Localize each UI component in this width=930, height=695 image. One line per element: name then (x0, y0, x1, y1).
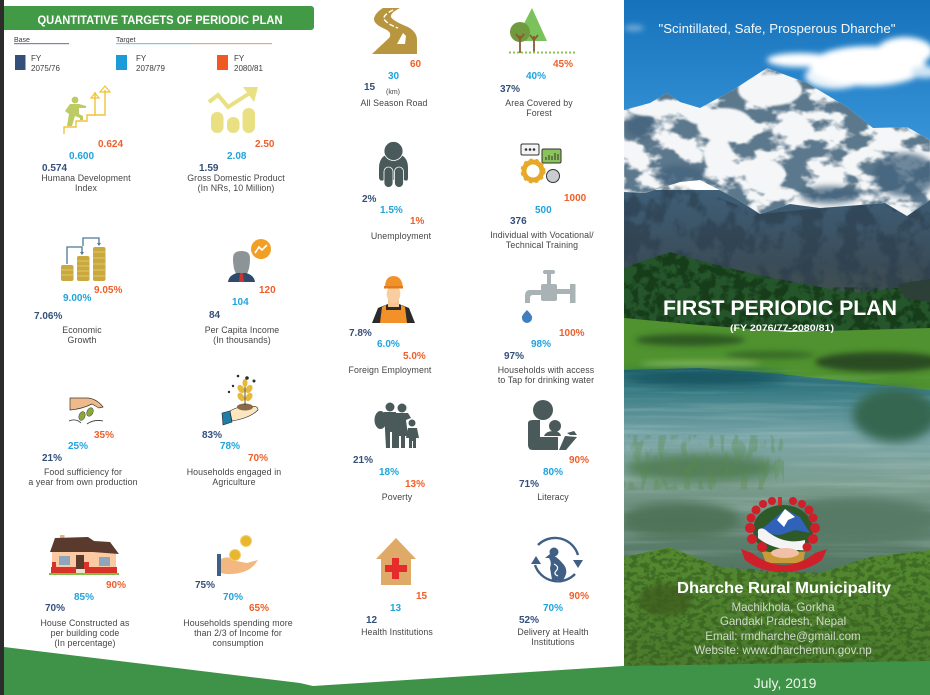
values: 6.0% (377, 339, 400, 350)
icon: hand dropping seeds (69, 398, 103, 424)
panel: House Constructed (40, 535, 130, 648)
label: Households with access (498, 365, 595, 375)
values: 5.0% (403, 351, 426, 362)
values: 2.50 (255, 139, 275, 150)
values: 7.06% (34, 311, 62, 322)
legend (14, 37, 272, 73)
values: 30 (388, 71, 400, 82)
label: Agriculture (212, 477, 256, 487)
legend: FY (136, 54, 147, 63)
values: 12 (366, 615, 378, 626)
icon: person climbing stairs (64, 86, 110, 134)
legend: 2075/76 (31, 64, 60, 73)
label: Households engaged in (187, 467, 281, 477)
label: Technical Training (506, 240, 578, 250)
values (353, 455, 425, 490)
values: 1.59 (199, 163, 219, 174)
panel: Health Institutions (361, 538, 433, 637)
values: 83% (202, 430, 222, 441)
panel: Economic Growth (34, 238, 122, 345)
icon: gear and speech bubbles (521, 144, 561, 182)
values: 52% (519, 615, 539, 626)
values: 104 (232, 297, 249, 308)
values: 500 (535, 205, 552, 216)
label: Poverty (382, 492, 413, 502)
values: 75% (195, 580, 215, 591)
label: Forest (526, 108, 552, 118)
label: Delivery at Health (517, 627, 589, 637)
values: 70% (543, 603, 563, 614)
panel: Tap water (498, 270, 595, 385)
panel: Households engaged in Agriculture (187, 375, 281, 487)
label: (In NRs, 10 Million) (198, 183, 274, 193)
label: Per Capita Income (205, 325, 279, 335)
label: (In percentage) (54, 638, 116, 648)
panel: Foreign Employment (349, 276, 432, 375)
values: 84 (209, 310, 221, 321)
panel: Per Capita Income (205, 239, 279, 345)
label: Unemployment (371, 231, 432, 241)
legend: FY (31, 54, 42, 63)
icon: winding road (372, 8, 417, 54)
date: July, 2019 (754, 675, 817, 691)
icon: person reading with child (528, 400, 577, 450)
left dark edge (0, 0, 4, 695)
label: All Season Road (360, 98, 428, 108)
legend: 2078/79 (136, 64, 165, 73)
label: consumption (213, 638, 263, 648)
values: 100% (559, 328, 585, 339)
values: 21% (42, 453, 62, 464)
contact details: Website: www.dharchemun.gov.np (694, 644, 872, 657)
values (42, 139, 123, 174)
values: 1.5% (380, 205, 403, 216)
icon: municipality emblem (741, 497, 827, 572)
values (42, 430, 114, 464)
label: than 2/3 of Income for (194, 628, 282, 638)
values (366, 591, 428, 626)
values: 9.00% (63, 293, 91, 304)
values: 1% (410, 216, 425, 227)
values: 1000 (564, 193, 587, 204)
values: 25% (68, 441, 88, 452)
legend: Base (14, 37, 30, 44)
label: Humana Development (41, 173, 131, 183)
panel: Area Covered by Forest (500, 8, 575, 118)
values (500, 59, 573, 95)
title banner: QUANTITATIVE TARGETS OF PERIODIC PLAN (38, 13, 282, 27)
label: per building code (51, 628, 119, 638)
label: Gross Domestic Product (187, 173, 285, 183)
values: 376 (510, 216, 527, 227)
values (362, 194, 425, 227)
values: 78% (220, 441, 240, 452)
values: 120 (259, 285, 276, 296)
values: 80% (543, 467, 563, 478)
values: 2% (362, 194, 377, 205)
label: Index (75, 183, 98, 193)
green bottom band (4, 647, 930, 695)
contact details: Email: rmdharche@gmail.com (705, 630, 861, 643)
legend: FY (234, 54, 245, 63)
panel: Gross Domestic Product (187, 87, 285, 193)
panel: Literacy (519, 400, 589, 502)
values (202, 430, 268, 464)
panel: Food sufficiency (28, 398, 138, 487)
values: 90% (106, 580, 126, 591)
label: Literacy (537, 492, 569, 502)
values: 21% (353, 455, 373, 466)
contact details: Gandaki Pradesh, Nepal (720, 615, 846, 628)
values: 60 (410, 59, 422, 70)
values: 70% (45, 603, 65, 614)
label: Growth (68, 335, 96, 345)
values: 85% (74, 592, 94, 603)
values (364, 59, 422, 96)
values (209, 285, 276, 321)
label: Foreign Employment (349, 365, 432, 375)
icon: rising bars and arrow (209, 87, 258, 133)
values: 0.574 (42, 163, 67, 174)
icon: businessman with rising chart badge (228, 239, 271, 282)
contact details: Machikhola, Gorkha (731, 601, 835, 614)
values: 0.600 (69, 151, 94, 162)
icon: house with red cross (376, 538, 416, 585)
values: 13 (390, 603, 402, 614)
icon: hand with coins (217, 536, 258, 576)
values: 70% (248, 453, 268, 464)
icon: person sitting head down (379, 142, 408, 188)
values: 13% (405, 479, 425, 490)
values: (km) (386, 89, 400, 96)
values (195, 580, 269, 614)
heading: First Periodic Plan: FIRST PERIODIC PLAN (663, 297, 897, 320)
values: 45% (553, 59, 573, 70)
panel: Poverty (353, 402, 425, 502)
panel: Unemployment (362, 142, 432, 241)
icon: water tap with drop (522, 270, 576, 323)
label: a year from own production (28, 477, 138, 487)
panel: landscape cover photo (615, 0, 930, 666)
values: 9.05% (94, 285, 122, 296)
values (519, 591, 589, 626)
panel: Households spending (183, 536, 293, 648)
icon: house (49, 535, 119, 575)
legend: Target (116, 37, 136, 44)
values (519, 455, 589, 490)
values: 0.624 (98, 139, 123, 150)
icon: coin stacks (61, 238, 106, 281)
label: Food sufficiency for (44, 467, 122, 477)
values: 70% (223, 592, 243, 603)
label: Institutions (531, 637, 575, 647)
icon: pregnant woman in cycle arrows (531, 538, 583, 581)
title banner (4, 6, 314, 30)
panel: Delivery at Health Institutions (517, 538, 589, 647)
legend: 2080/81 (234, 64, 263, 73)
values: 71% (519, 479, 539, 490)
values (45, 580, 126, 614)
values: 15 (364, 82, 376, 93)
label: House Constructed as (40, 618, 130, 628)
icon: family (374, 402, 419, 448)
icon: trees (509, 8, 575, 53)
values (510, 193, 587, 227)
values (349, 328, 426, 362)
label: Area Covered by (505, 98, 573, 108)
values: 7.8% (349, 328, 372, 339)
values: 97% (504, 351, 524, 362)
values: 90% (569, 455, 589, 466)
label: Health Institutions (361, 627, 433, 637)
values: 37% (500, 84, 520, 95)
heading: First Periodic Plan (663, 297, 897, 334)
values: 65% (249, 603, 269, 614)
label: Households spending more (183, 618, 293, 628)
panel: Human Development Index (41, 86, 131, 193)
values: 2.08 (227, 151, 247, 162)
heading: First Periodic Plan: (FY 2076/77-2080/81) (730, 323, 834, 334)
label: Individual with Vocational/ (490, 230, 594, 240)
label: Economic (62, 325, 102, 335)
values (34, 285, 122, 322)
label: to Tap for drinking water (498, 375, 594, 385)
values: 18% (379, 467, 399, 478)
panel: All Season Road (360, 8, 428, 108)
values: 90% (569, 591, 589, 602)
slogan: "Scintillated, Safe, Prosperous Dharche" (658, 22, 896, 36)
panel: Vocational Training (490, 144, 594, 250)
values: 40% (526, 71, 546, 82)
heading: municipality name: Dharche Rural Municipality (677, 580, 891, 597)
icon: construction worker (372, 276, 415, 323)
icon: hand holding wheat plant (222, 375, 258, 425)
values (504, 328, 585, 362)
values (199, 139, 275, 174)
label: (In thousands) (213, 335, 271, 345)
values: 98% (531, 339, 551, 350)
values: 35% (94, 430, 114, 441)
values: 15 (416, 591, 428, 602)
